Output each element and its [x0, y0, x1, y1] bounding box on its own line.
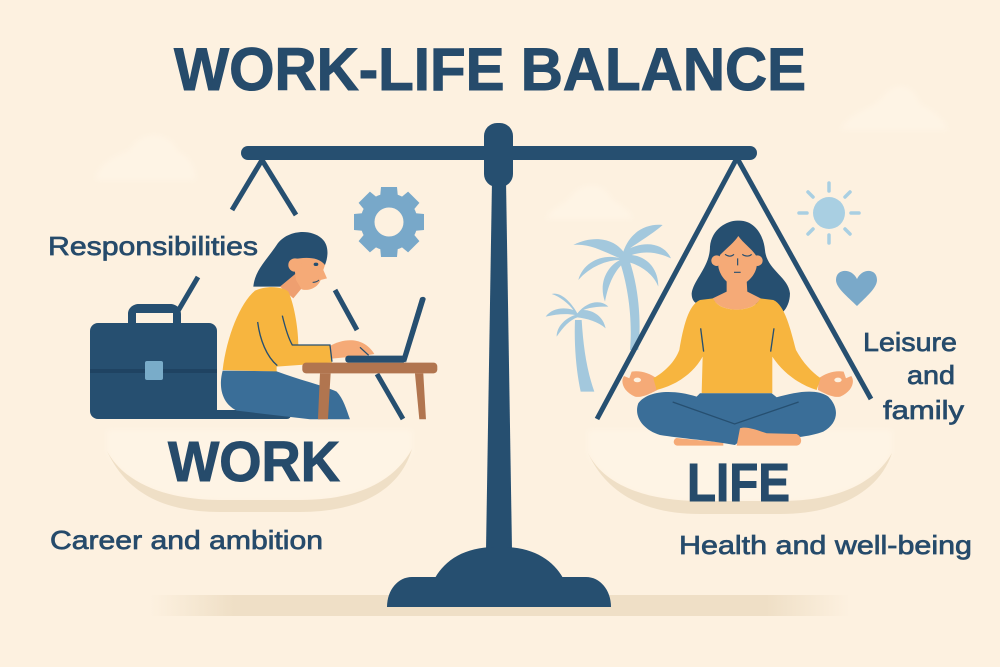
title: WORK-LIFE BALANCE	[174, 36, 806, 103]
table	[318, 373, 426, 419]
ground shadow	[150, 595, 850, 616]
hair	[253, 232, 327, 287]
label: LIFE: LIFE	[687, 453, 790, 513]
label: Leisure and family: family	[883, 395, 964, 425]
label: Leisure and family: Leisure	[863, 327, 957, 357]
label: Leisure and family	[863, 327, 964, 425]
sweater	[653, 298, 821, 393]
label: Responsibilities: Responsibilities	[48, 231, 258, 261]
feet	[674, 438, 723, 446]
label: WORK: WORK	[168, 430, 340, 494]
scale: pillar and beam	[241, 123, 757, 607]
illustration: briefcase	[90, 304, 291, 419]
face	[711, 236, 763, 310]
scale: right pan	[588, 453, 892, 514]
pants	[221, 371, 350, 419]
icon: palm trees	[546, 225, 671, 392]
illustration: working woman	[221, 232, 437, 419]
label: Career and ambition: Career and ambition	[50, 525, 323, 555]
label: Leisure and family: and	[907, 360, 955, 390]
label: Health and well-being: Health and well-being	[679, 530, 972, 560]
hands	[622, 371, 657, 397]
scale: hanger lines	[178, 158, 871, 419]
illustration: meditating woman	[622, 221, 853, 446]
icon: heart	[836, 271, 877, 306]
sweater	[223, 287, 332, 372]
neck	[280, 273, 302, 298]
hand	[330, 340, 374, 359]
laptop	[402, 297, 426, 363]
hair	[692, 221, 790, 312]
icon: gear	[354, 187, 424, 257]
icon: sun	[799, 183, 859, 243]
scale: left pan	[107, 449, 412, 512]
pants	[637, 392, 836, 445]
face	[293, 258, 327, 290]
